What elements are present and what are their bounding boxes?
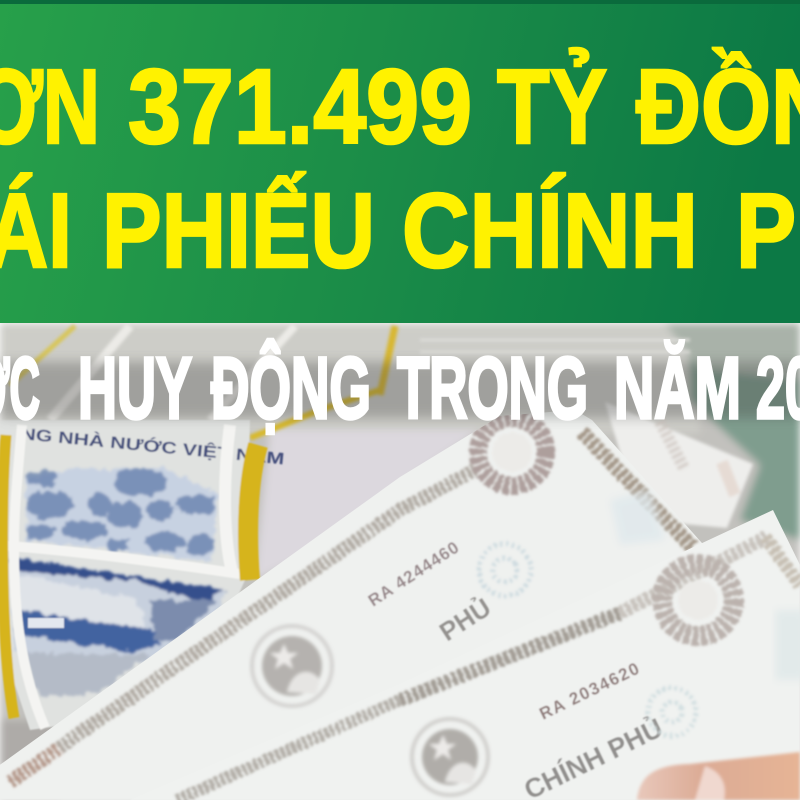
bond rosette <box>662 564 734 636</box>
thumb holding bonds <box>637 752 800 800</box>
government bond in the back <box>605 402 753 528</box>
watermark pattern <box>476 540 534 599</box>
green header panel <box>0 0 800 323</box>
headline line 2 <box>0 172 800 290</box>
national emblem <box>412 719 488 795</box>
bond ornamental border <box>177 537 800 800</box>
serial number: RA 4244460 <box>365 537 463 610</box>
banknote caption: NG NHÀ NƯỚC VIỆT NAM <box>20 424 285 468</box>
headline line 1: 371.499 <box>128 48 472 166</box>
white paper straps <box>0 425 240 728</box>
photo background <box>0 323 800 800</box>
headline line 1: TỶ <box>497 48 607 166</box>
banknote bundle <box>0 420 285 730</box>
bond ornamental border <box>10 432 692 782</box>
headline line 2: PHIẾU <box>102 172 375 290</box>
yellow rubber bands <box>3 435 258 718</box>
upper government bond <box>0 412 702 800</box>
photo: stacks of money and government bonds <box>0 323 800 800</box>
background money bundles <box>10 326 690 438</box>
subtitle text <box>0 340 800 437</box>
lower government bond <box>174 510 800 800</box>
printed trees on banknote <box>26 468 218 562</box>
headline line 1 <box>0 48 800 166</box>
subtitle text: HUY <box>78 340 192 437</box>
subtitle shadow <box>0 362 800 418</box>
subtitle on photo <box>0 340 800 437</box>
bond rosette <box>478 418 546 486</box>
subtitle text: ĐỘNG <box>211 340 371 437</box>
headline line 2: CHÍNH <box>402 172 698 290</box>
watermark pattern <box>644 685 699 740</box>
serial number: RA 2034620 <box>536 658 643 724</box>
bond title: PHỦ <box>433 591 496 647</box>
national emblem <box>252 626 332 706</box>
printed house on banknote <box>10 558 225 698</box>
subtitle text: TRONG <box>397 340 588 437</box>
